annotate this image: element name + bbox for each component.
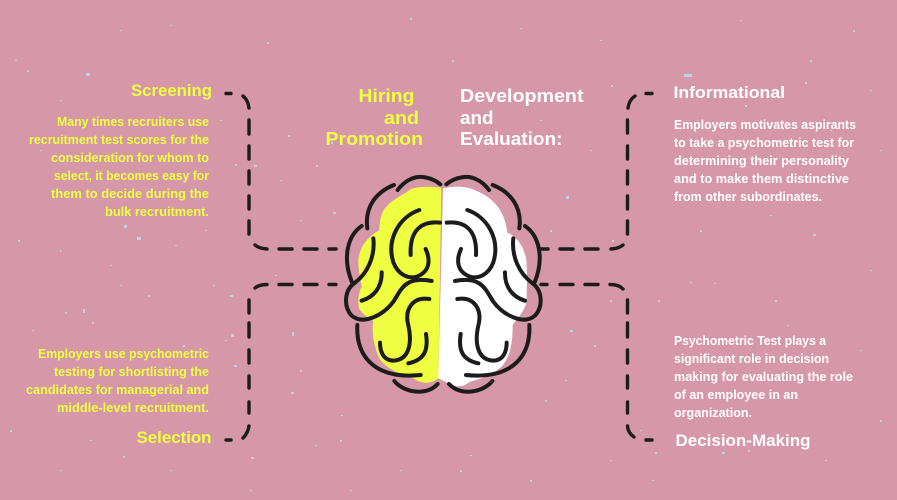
text block: Decision-Making: making for evaluating the role [674,370,853,384]
text block: Selection [26,347,209,415]
dashed connector: Informational [541,94,652,249]
heading: Development and Evaluation: Development [460,85,584,106]
heading: Hiring and Promotion: and [384,107,419,128]
text block: Screening: Many times recruiters use [57,115,209,129]
heading: Hiring and Promotion: Hiring [358,85,414,106]
heading: Hiring and Promotion: Promotion [326,128,423,149]
heading: Screening: Screening [131,81,212,100]
text block: Screening: select, it becomes easy for [54,169,209,183]
text block: Informational [674,118,856,204]
brain right hemisphere fill [438,187,527,386]
brain illustration [346,177,541,392]
brain outline right [446,177,541,392]
heading: Development and Evaluation: Evaluation: [460,128,562,149]
brain left hemisphere fill [358,187,441,383]
text block: Decision-Making: organization. [674,406,752,420]
text block: Decision-Making: Psychometric Test plays a [674,334,827,348]
text block: Informational: Employers motivates aspirants [674,118,856,132]
text block: Selection: middle-level recruitment. [57,401,209,415]
dashed connector: Screening [226,94,336,249]
text block: Selection: candidates for managerial and [26,383,209,397]
heading: Development and Evaluation [460,85,584,149]
text block: Selection: testing for shortlisting the [54,365,209,379]
text block: Selection: Employers use psychometric [38,347,209,361]
text block: Screening: bulk recruitment. [105,205,209,219]
heading: Selection: Selection [136,428,212,447]
text block: Screening [29,115,209,219]
dashed connector: Decision-Making [541,284,652,440]
dashed connector: Selection [226,284,336,440]
heading: Informational: Informational [674,83,785,102]
heading: Decision-Making: Decision-Making [676,431,810,450]
text block: Decision-Making: significant role in decision [674,352,829,366]
heading: Hiring and Promotion [326,85,423,149]
heading: Development and Evaluation: and [460,107,494,128]
text block: Informational: to take a psychometric test for [674,136,854,150]
text block: Decision-Making [674,334,853,420]
text block: Screening: them to decide during the [51,187,209,201]
text block: Decision-Making: of an employee in an [674,388,798,402]
text block: Screening: consideration for whom to [51,151,209,165]
text block: Screening: recruitment test scores for the [29,133,209,147]
text block: Informational: and to make them distinctive [674,172,849,186]
brain outline left [346,177,440,392]
text block: Informational: determining their personality [674,154,849,168]
text block: Informational: from other subordinates. [674,190,822,204]
